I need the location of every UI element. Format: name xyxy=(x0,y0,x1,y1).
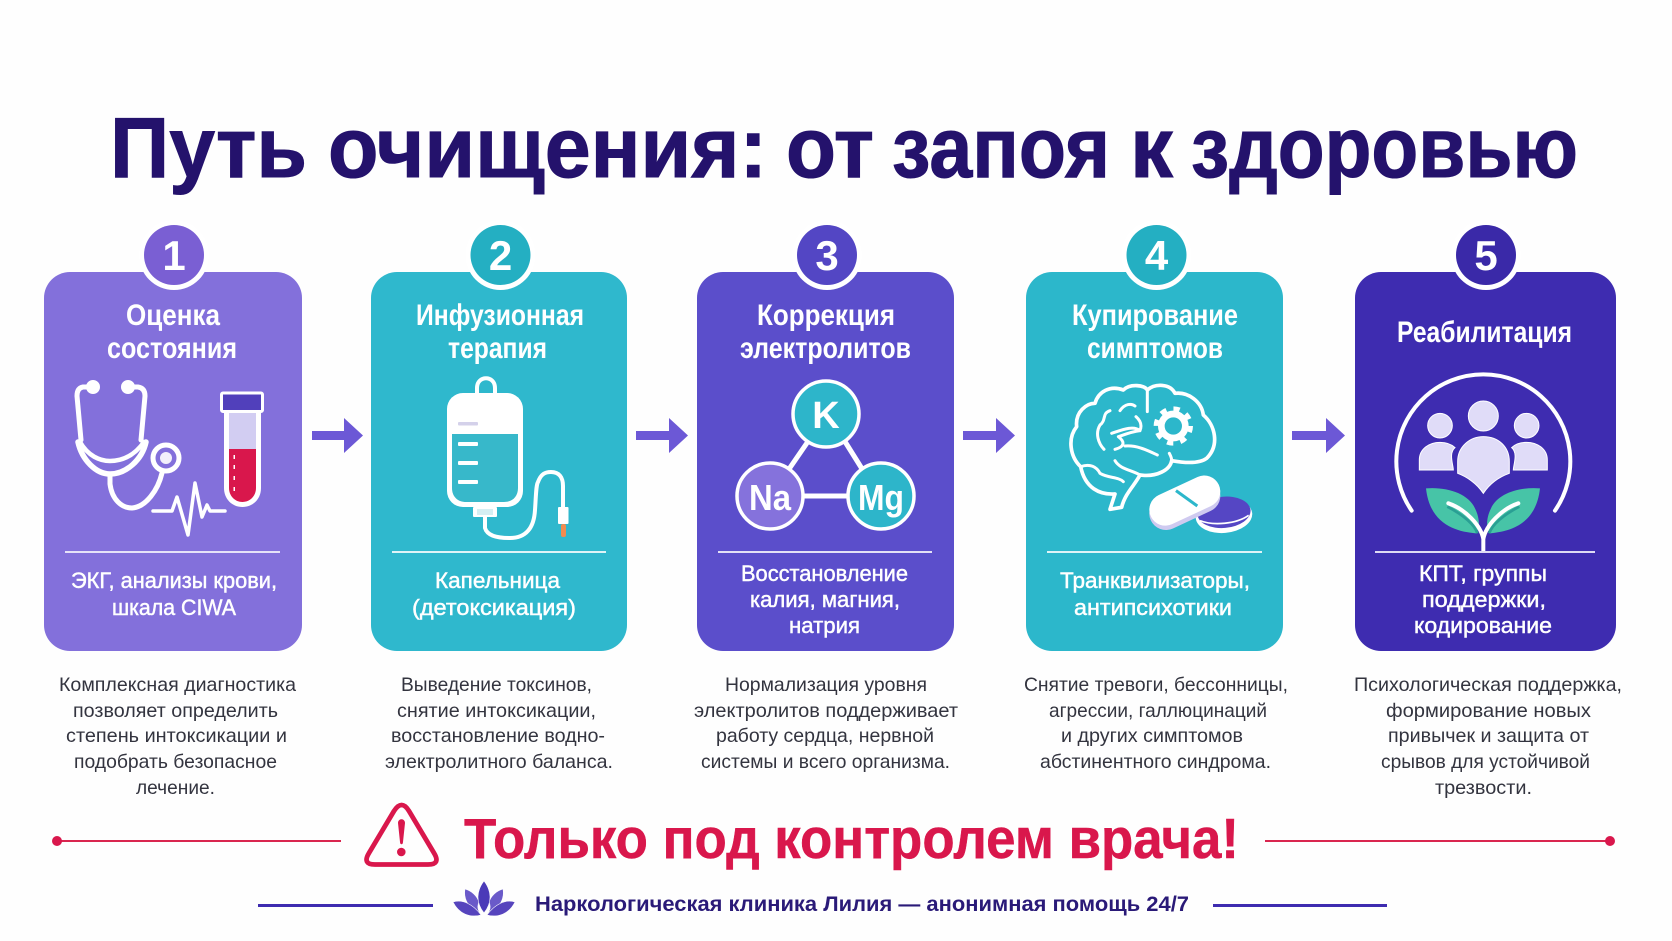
arrow 4 xyxy=(1292,418,1345,453)
subtitle: поддержки, xyxy=(1422,587,1546,612)
title: очищения: xyxy=(328,101,767,196)
icon: test tube xyxy=(222,393,262,507)
heading: Купирование xyxy=(1072,299,1238,332)
subtitle xyxy=(1060,568,1250,620)
description: step 5: привычек и защита от xyxy=(1388,725,1589,747)
heading: Оценка xyxy=(126,299,220,332)
icon: electrolytes: Na xyxy=(749,477,792,518)
arrow 3 xyxy=(963,418,1015,453)
icon: pills xyxy=(1144,470,1254,536)
icon: stethoscope xyxy=(77,380,179,508)
subtitle: шкала CIWA xyxy=(112,595,236,620)
arrow 1 xyxy=(312,418,363,453)
description: step 5: формирование новых xyxy=(1386,700,1591,722)
description: step 1 xyxy=(59,674,296,799)
description: step 3: электролитов поддерживает xyxy=(694,700,958,722)
subtitle: Капельница xyxy=(435,568,561,593)
warning text: Только под контролем врача! xyxy=(464,807,1239,871)
description: step 4: и других симптомов xyxy=(1061,725,1243,747)
title: к xyxy=(1130,101,1173,196)
title: здоровью xyxy=(1191,101,1578,196)
heading: Коррекция xyxy=(757,299,895,332)
description: step 1: лечение. xyxy=(136,777,215,799)
subtitle: Транквилизаторы, xyxy=(1060,568,1250,593)
subtitle: КПТ, группы xyxy=(1419,561,1547,586)
description: step 4: Снятие тревоги, бессонницы, xyxy=(1024,674,1288,696)
step number: 5 xyxy=(1474,232,1498,279)
panel: step 1 xyxy=(44,220,302,651)
step number xyxy=(1122,220,1192,290)
icon: lotus logo xyxy=(453,881,515,916)
step number: 4 xyxy=(1145,232,1169,279)
warning lines xyxy=(52,836,1615,846)
heading xyxy=(107,299,237,365)
description: step 4: агрессии, галлюцинаций xyxy=(1049,700,1267,722)
panel: step 3 xyxy=(697,220,954,651)
heading xyxy=(1072,299,1238,365)
title: запоя xyxy=(892,101,1110,196)
divider xyxy=(392,551,606,553)
description: step 3: работу сердца, нервной xyxy=(716,725,934,747)
heading xyxy=(416,299,584,365)
card background xyxy=(371,272,627,651)
footer lines xyxy=(258,904,1387,907)
icon: ECG trace xyxy=(153,483,225,535)
subtitle: антипсихотики xyxy=(1074,595,1232,620)
description: step 4: абстинентного синдрома. xyxy=(1040,751,1271,773)
card background xyxy=(1355,272,1616,651)
heading: симптомов xyxy=(1087,332,1223,365)
title: от xyxy=(786,101,874,196)
description: step 1: позволяет определить xyxy=(73,700,278,722)
subtitle xyxy=(412,568,576,620)
subtitle: натрия xyxy=(789,613,860,638)
heading: состояния xyxy=(107,332,237,365)
icon: electrolytes: Mg xyxy=(858,477,904,518)
description: step 5: Психологическая поддержка, xyxy=(1354,674,1622,696)
card background xyxy=(697,272,954,651)
description: step 2: снятие интоксикации, xyxy=(397,700,596,722)
icon: warning triangle xyxy=(367,805,436,864)
footer text: Наркологическая клиника Лилия — анонимная помощь 24/7 xyxy=(535,893,1189,916)
icon: electrolytes xyxy=(737,381,914,529)
description: step 3: Нормализация уровня xyxy=(725,674,927,696)
icon: electrolytes: K xyxy=(812,395,840,437)
icon: people and sprout xyxy=(1396,374,1570,551)
step number: 3 xyxy=(815,232,839,279)
description: step 2: восстановление водно- xyxy=(391,725,605,747)
card background xyxy=(1026,272,1283,651)
subtitle xyxy=(71,568,277,620)
title xyxy=(110,101,1578,196)
card background xyxy=(44,272,302,651)
title: Путь xyxy=(110,101,307,196)
step number: 2 xyxy=(489,232,512,279)
subtitle: Восстановление xyxy=(741,561,908,586)
description: step 5: трезвости. xyxy=(1435,777,1532,799)
panel: step 4 xyxy=(1026,220,1283,651)
divider xyxy=(718,551,932,553)
heading: терапия xyxy=(448,332,547,365)
description: step 3 xyxy=(694,674,958,773)
subtitle: ЭКГ, анализы крови, xyxy=(71,568,277,593)
icon: brain xyxy=(1071,385,1215,509)
description: step 2 xyxy=(385,674,613,773)
step number: 1 xyxy=(162,232,186,279)
description: step 1: Комплексная диагностика xyxy=(59,674,296,696)
description: step 2: Выведение токсинов, xyxy=(401,674,592,696)
step number xyxy=(466,220,536,290)
description: step 1: подобрать безопасное xyxy=(74,751,277,773)
step number xyxy=(1451,220,1521,290)
subtitle: кодирование xyxy=(1414,613,1552,638)
divider xyxy=(1047,551,1262,553)
description: step 3: системы и всего организма. xyxy=(701,751,950,773)
description: step 5: срывов для устойчивой xyxy=(1381,751,1590,773)
heading: Инфузионная xyxy=(416,299,584,332)
description: step 4 xyxy=(1024,674,1288,773)
panel: step 5 xyxy=(1355,220,1616,651)
icon: IV bag xyxy=(447,378,568,538)
subtitle xyxy=(741,561,908,638)
description: step 2: электролитного баланса. xyxy=(385,751,613,773)
heading: электролитов xyxy=(740,332,911,365)
step number xyxy=(139,220,209,290)
panel: step 2 xyxy=(371,220,627,651)
subtitle xyxy=(1414,561,1552,638)
divider xyxy=(65,551,280,553)
arrow 2 xyxy=(636,418,688,453)
step number xyxy=(792,220,862,290)
description: step 1: степень интоксикации и xyxy=(66,725,287,747)
heading xyxy=(740,299,911,365)
subtitle: калия, магния, xyxy=(750,587,900,612)
heading: Реабилитация xyxy=(1397,316,1572,349)
divider xyxy=(1375,551,1595,553)
subtitle: (детоксикация) xyxy=(412,595,576,620)
description: step 5 xyxy=(1354,674,1622,799)
